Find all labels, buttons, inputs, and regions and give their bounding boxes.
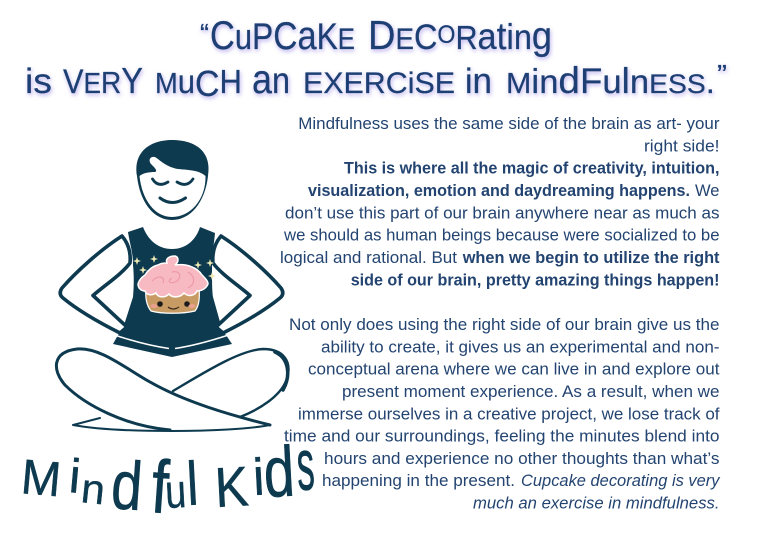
text block: right side of the brain: This is where all the magic of creativity, intuition,	[344, 160, 720, 178]
left arm	[60, 236, 130, 333]
title: CuPCaKE	[210, 14, 355, 58]
logo: Mindful Kids: d	[262, 433, 296, 513]
frosting swirls	[152, 272, 194, 288]
title: C	[195, 63, 220, 104]
text block: present moment experience: ability to create, it gives us an experimental and non-	[321, 338, 720, 356]
text block: present moment experience: conceptual arena where we can live in and explore out	[308, 361, 720, 379]
text block: present moment experience: present moment experience. As a result, when we	[342, 383, 720, 401]
tank top	[113, 227, 232, 357]
title: in	[465, 60, 492, 101]
text block: present moment experience: time and our surroundings, feeling the minutes blend into	[284, 428, 720, 446]
title: “	[200, 18, 209, 48]
title: DEC	[368, 12, 439, 58]
logo: Mindful Kids: l	[185, 449, 200, 518]
text block: right side of the brain: right side!	[644, 137, 720, 155]
title: H	[220, 63, 242, 100]
crossed legs	[56, 349, 288, 431]
title: MindFulnESS.	[506, 60, 715, 101]
logo: Mindful Kids	[19, 424, 316, 530]
title: is	[25, 62, 52, 101]
text block: right side of the brain	[280, 115, 720, 289]
text block: right side of the brain: We	[695, 182, 720, 200]
text block: present moment experience: much an exercise in mindfulness.	[473, 494, 720, 512]
text block: present moment experience: Not only does using the right side of our brain give us the	[289, 316, 720, 334]
text block: right side of the brain: when we begin to utilize the right	[462, 249, 720, 267]
title: ”	[717, 59, 727, 89]
title: ating	[478, 15, 554, 58]
title: Mu	[155, 63, 196, 100]
text block: present moment experience: Cupcake decorating is very	[521, 472, 721, 490]
logo: Mindful Kids: n	[79, 465, 107, 513]
title: an	[252, 56, 290, 102]
cupcake face	[150, 301, 196, 309]
logo: Mindful Kids: f	[149, 446, 171, 530]
title	[25, 12, 727, 104]
text block: present moment experience: immerse ourselves in a creative project, we lose track of	[298, 405, 720, 423]
text block: right side of the brain: don’t use this part of our brain anywhere near as much as	[285, 204, 720, 222]
logo: Mindful Kids: M	[19, 450, 63, 508]
text block: right side of the brain: we should as human beings because were socialized to be	[283, 227, 720, 245]
text block: right side of the brain: logical and rational. But	[280, 249, 457, 267]
text block: present moment experience	[284, 316, 721, 512]
cupcake base	[146, 288, 199, 313]
text block: right side of the brain: side of our brain, pretty amazing things happen!	[351, 271, 720, 289]
logo: Mindful Kids: K	[213, 456, 250, 520]
logo: Mindful Kids: d	[109, 447, 145, 526]
logo: Mindful Kids: u	[164, 465, 187, 519]
meditating figure	[56, 140, 288, 431]
title: R	[455, 19, 478, 56]
frosting	[138, 256, 208, 297]
title: VERY	[63, 60, 143, 101]
title: EXERCiSE	[303, 67, 455, 100]
hand slivers	[116, 336, 227, 348]
text block: present moment experience: happening in the present.	[322, 472, 515, 490]
text block: right side of the brain: Mindfulness uses the same side of the brain as art- your	[298, 115, 720, 133]
head	[136, 140, 209, 220]
cupcake illustration	[133, 255, 216, 313]
logo: Mindful Kids: s	[295, 424, 316, 507]
text block: right side of the brain: visualization, emotion and daydreaming happens.	[308, 182, 690, 200]
stars	[133, 255, 216, 280]
text block: present moment experience: hours and experience no other thoughts than what’s	[324, 450, 720, 468]
right arm	[213, 236, 283, 333]
logo: Mindful Kids: i	[252, 448, 266, 506]
title: O	[437, 21, 455, 49]
logo: Mindful Kids: i	[67, 450, 83, 504]
